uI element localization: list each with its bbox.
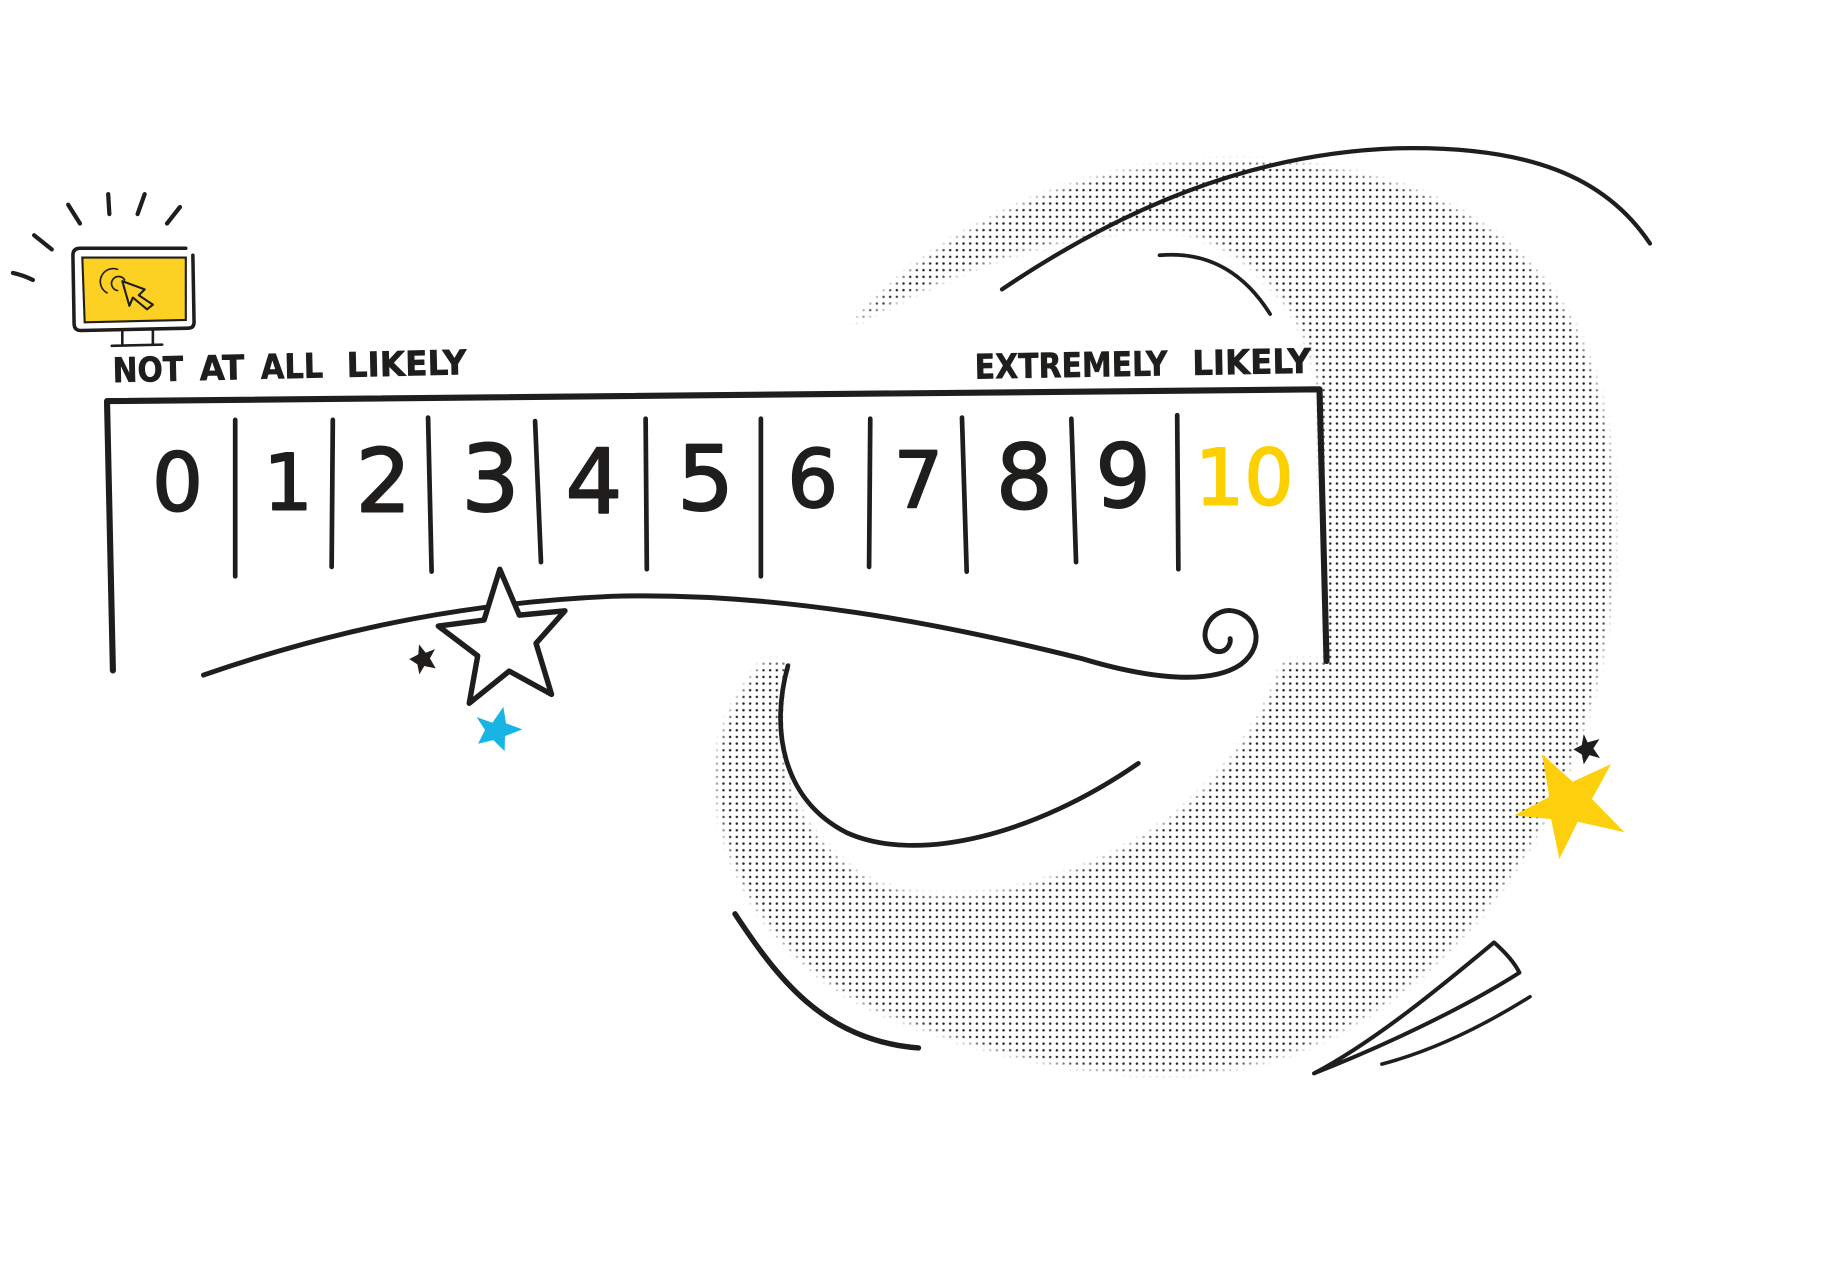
label: extremely likely: LIKELY xyxy=(1192,342,1312,384)
scale numbers: 2 xyxy=(356,431,411,533)
scale dividers xyxy=(235,415,1178,576)
scale numbers: 3 xyxy=(461,425,520,532)
scale numbers: 8 xyxy=(996,426,1053,530)
label: not at all likely: AT xyxy=(199,348,245,389)
scale numbers xyxy=(152,425,1294,535)
label: not at all likely: NOT xyxy=(112,350,184,391)
scale numbers: 9 xyxy=(1095,426,1151,528)
icon: yellow star xyxy=(1514,754,1624,859)
label: extremely likely: EXTREMELY xyxy=(974,344,1169,388)
icon: large outlined star xyxy=(438,569,565,703)
scale numbers: 4 xyxy=(565,431,622,535)
arc: small inner curve xyxy=(1160,255,1270,314)
icon: blue star xyxy=(477,707,522,751)
arc: lower inner curve xyxy=(781,666,1138,845)
icon: small black star left xyxy=(409,644,436,674)
arc: bottom left curve xyxy=(735,914,918,1048)
scale numbers: 7 xyxy=(894,436,943,526)
icon: small black star right xyxy=(1573,734,1600,764)
swoosh line with curl xyxy=(203,596,1256,677)
streak trailing line xyxy=(1382,997,1530,1064)
cursor arrow xyxy=(122,281,153,309)
monitor stand xyxy=(112,331,162,346)
halftone dotted crescent backdrop xyxy=(694,141,1635,1094)
attention rays xyxy=(13,194,180,280)
arc: top sweeping curve xyxy=(1002,148,1650,289)
yellow screen xyxy=(82,258,186,322)
streak outline xyxy=(1314,942,1519,1073)
click ripple xyxy=(100,269,125,293)
icon: computer monitor with cursor xyxy=(13,194,194,346)
scale numbers: 5 xyxy=(677,427,734,531)
scale numbers: 6 xyxy=(787,433,838,526)
scale numbers: 1 xyxy=(263,438,313,528)
icon: paper plane streak xyxy=(1314,942,1530,1073)
scale frame xyxy=(107,389,1327,670)
scale numbers: 0 xyxy=(152,436,203,529)
highlighted number 10: 10 xyxy=(1195,434,1294,524)
label: not at all likely: LIKELY xyxy=(346,343,468,386)
label: not at all likely: ALL xyxy=(260,347,324,388)
monitor frame xyxy=(73,248,194,331)
